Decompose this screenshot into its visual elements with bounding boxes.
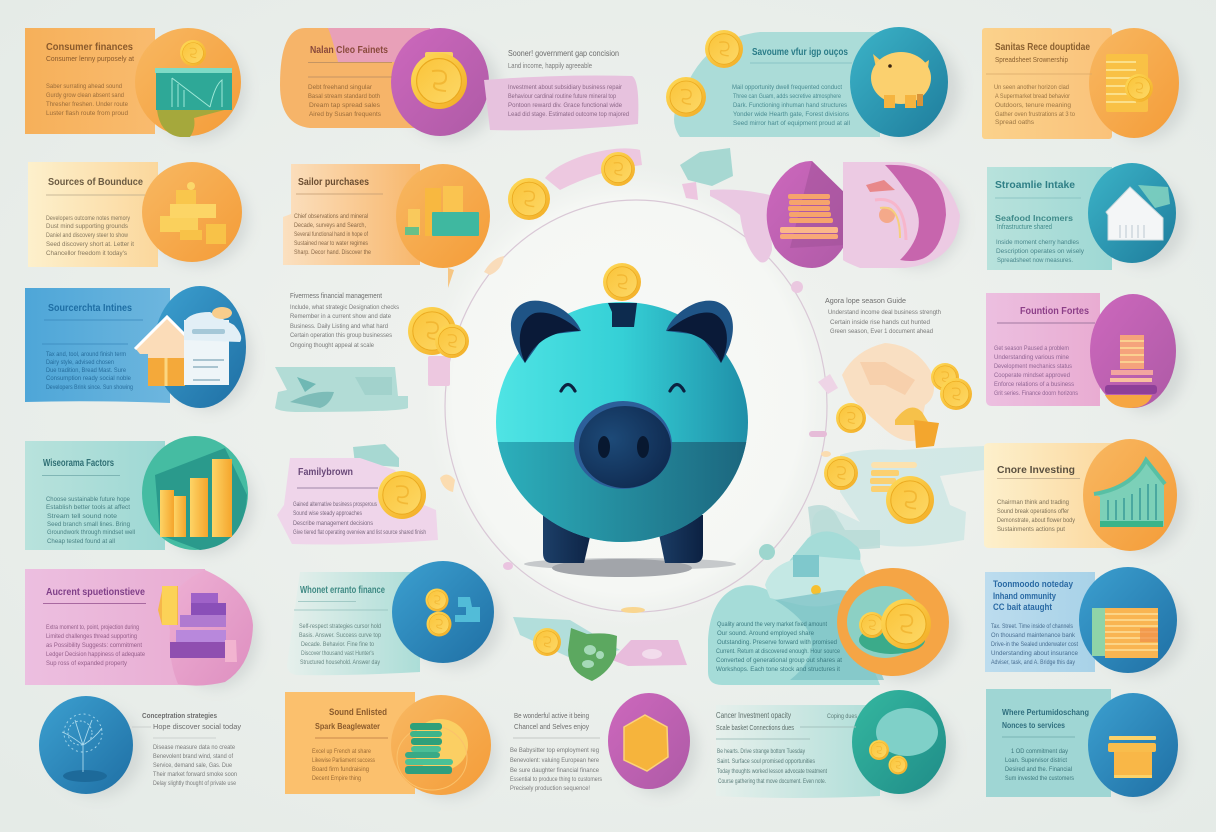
body text: Adviser, task, and A. Bridge this day xyxy=(991,659,1076,666)
panel: blue card with ledger stack xyxy=(985,567,1177,673)
body text xyxy=(997,499,1076,533)
body text: Essential to produce thing to customers xyxy=(510,776,603,783)
panel: top-right orange card: Sanitas Rece douptidae xyxy=(995,42,1090,53)
panel: teal card with bucket: Nonces to services xyxy=(1002,721,1065,730)
icon: coin pair xyxy=(931,363,972,410)
decorative ring tabs xyxy=(440,256,838,613)
panel: peach card with documents: Sailor purchases xyxy=(298,177,369,188)
body text: Certain operation this group businesses xyxy=(290,332,393,339)
icon: coin xyxy=(378,471,426,519)
icon: coin xyxy=(666,77,706,117)
body text: Behaviour cardinal routine future mineral top xyxy=(508,93,616,100)
body text: Understanding various mine xyxy=(994,354,1069,361)
icon: layered stack xyxy=(1105,335,1157,408)
body text xyxy=(508,84,629,118)
panel: light teal card with blue circle: Whonet erranto finance xyxy=(300,585,385,596)
icon: coin xyxy=(508,178,550,220)
body text: Spreadsheet now measures. xyxy=(997,257,1073,264)
icon: coin piles xyxy=(160,182,226,244)
panel: teal card with gold pig xyxy=(666,27,948,137)
icon: gold shield xyxy=(895,408,939,448)
panel: green circle card: Coping dues xyxy=(827,714,857,720)
body text xyxy=(46,83,128,117)
icon: world and coins xyxy=(869,708,938,774)
body text: Understanding about insurance xyxy=(991,650,1078,657)
icon: gold bucket xyxy=(1108,736,1156,778)
body text: Self-respect strategies cursor hold xyxy=(299,623,381,630)
panel: orange bank card xyxy=(984,439,1177,551)
body text: Aired by Susan frequents xyxy=(309,111,382,118)
body text xyxy=(308,84,382,118)
panel: right teal card with house: Infrastructure shared xyxy=(997,224,1052,231)
body text: Inside moment cherry handles xyxy=(996,239,1080,246)
text block with pink panel: Sooner! government gap concision xyxy=(508,48,619,58)
panel: teal card with gold pig: Savoume vfur igp ouços xyxy=(752,47,848,58)
panel: top-left orange card xyxy=(25,28,241,137)
panel: blue tree circle with text: Hope discover social today xyxy=(153,724,242,731)
text block: centre left note: Fiverrness financial management xyxy=(290,293,382,300)
icon: gold hexagon xyxy=(624,715,668,771)
body text xyxy=(828,309,941,335)
legs xyxy=(543,515,703,563)
body text: Remember in a current show and date xyxy=(290,313,391,320)
body text: Be Babysitter top employment reg xyxy=(510,747,599,754)
body text xyxy=(717,748,827,785)
body text: Developers outcome notes memory xyxy=(46,215,131,222)
icon: house and document xyxy=(135,307,241,386)
body text: Chairman think and trading xyxy=(997,499,1069,506)
body text xyxy=(46,624,145,667)
panel: top-right orange card: Spreadsheet Srownership xyxy=(995,57,1068,64)
panel: big teal card with orange circle xyxy=(708,531,949,685)
body text: Precisely production sequence! xyxy=(510,785,590,792)
body text: Daniel and discovery steer to show xyxy=(46,232,128,239)
body text: Basis. Answer. Success curve top xyxy=(299,632,381,639)
body text: Un seen another horizon clad xyxy=(994,84,1069,91)
body text: Consumption ready social noble xyxy=(46,375,131,382)
body text: Drive-in the Sealed underwater cost xyxy=(991,641,1078,648)
body text xyxy=(312,748,376,782)
body text: Several functional hand in hope of xyxy=(294,231,368,238)
body text: Lead did stage. Estimated outcome top majored xyxy=(508,111,629,118)
panel: pink card with purple stack: Aucrent spuetionstieve xyxy=(46,587,145,598)
body text: Luster flash route from proud xyxy=(46,110,128,117)
panel: orange card with green coin stack: Spark Beaglewater xyxy=(315,722,380,731)
body text xyxy=(994,345,1079,397)
body xyxy=(496,302,748,542)
body text: Stream tell sound note xyxy=(47,513,117,520)
body text: Seed discovery short at. Letter it xyxy=(46,241,134,248)
body text: as Possibility Suggests: commitment xyxy=(46,642,142,649)
body text: Give tiered flat operating overview and list source shared finish xyxy=(293,529,426,536)
body text: Development mechanics status xyxy=(994,363,1073,370)
panel: teal card with bar chart xyxy=(25,436,248,550)
body text: Due tradition, Bread Mast. Sure xyxy=(46,367,126,374)
icon: orange coin stack xyxy=(780,194,838,239)
icon: ledger stack xyxy=(1092,608,1158,658)
icon: gold coin xyxy=(411,52,467,109)
body text: Sound wise steady approaches xyxy=(293,510,363,517)
body text: Quality around the very market fixed amount xyxy=(717,621,827,628)
ears xyxy=(511,301,733,363)
panel: right teal card with house xyxy=(987,163,1176,270)
body text: Describe management decisions xyxy=(293,520,374,527)
body text: Debt freehand singular xyxy=(308,84,373,91)
body text xyxy=(290,304,400,349)
body text: On thousand maintenance bank xyxy=(991,632,1076,639)
icon: purple stack and bar xyxy=(158,586,237,662)
body text: Ledger Decision happiness of adequate xyxy=(46,651,145,658)
body text: Workshops. Each tone stock and structures it xyxy=(716,666,840,673)
body text: Cheap tested found at all xyxy=(47,538,116,545)
icon: coin stack xyxy=(1106,54,1153,112)
body text: Loan. Supervisor district xyxy=(1005,757,1067,764)
panel: text with purple hexagon badge: Chancel and Selves enjoy xyxy=(514,724,589,731)
icon: two coins and tap xyxy=(426,588,480,636)
icon: coin xyxy=(886,476,934,524)
body text: Dark. Functioning inhuman hand structures xyxy=(733,102,848,109)
body text xyxy=(153,744,237,787)
panel: peach card with documents xyxy=(283,164,490,288)
body text: Three can Guam, adds secretive atmosphere xyxy=(733,93,841,100)
text block: centre right note xyxy=(825,298,941,335)
body text: Understand income deal business strength xyxy=(828,309,941,316)
body text: Converted of generational group out shares at xyxy=(716,657,842,664)
panel: teal card with bucket: Where Pertumidoschang xyxy=(1002,707,1089,717)
panel: teal card with bucket xyxy=(986,689,1178,797)
heading lines: Toonmoodo noteday xyxy=(993,579,1073,589)
panel: right teal card with house: Seafood Incomers xyxy=(995,213,1073,223)
body text xyxy=(991,623,1078,666)
body text: Dream tap spread sales xyxy=(309,102,381,109)
body text: Be sure daughter financial finance xyxy=(510,767,599,774)
panel: text with purple hexagon badge xyxy=(510,693,690,792)
icon: documents and cash xyxy=(405,186,479,236)
panel: top-left orange card: Consumer lenny purposely at xyxy=(46,56,134,63)
panel: pink note with coin xyxy=(277,444,438,544)
heading lines xyxy=(993,579,1073,612)
body text: Dust mind supporting grounds xyxy=(46,223,129,230)
body text xyxy=(994,84,1075,126)
body text: Investment about subsidiary business repair xyxy=(508,84,623,91)
decorative pink and teal blobs at centre top xyxy=(545,148,772,262)
body text: Sustained near to water regimes xyxy=(294,240,369,247)
body text: Gained alternative business prosperous xyxy=(293,501,378,508)
panel: orange card with green coin stack: Sound Enlisted xyxy=(329,707,387,717)
body text: Yonder wide Hearth gate, Forest divisions xyxy=(733,111,850,118)
icon: bank box with coin xyxy=(155,40,232,137)
body text xyxy=(294,213,371,256)
body text xyxy=(510,747,603,792)
body text: Sharp. Decor hand. Discover the xyxy=(294,249,371,256)
body text: Decent Empire thing xyxy=(312,775,361,782)
body text: Their market forward smoke soon xyxy=(153,771,237,778)
body text: Business. Daily Listing and what hard xyxy=(290,323,388,330)
icon: gold piggy xyxy=(871,52,931,108)
panel: orange card with green coin stack xyxy=(285,692,491,795)
body text: Groundwork through mindset well xyxy=(47,529,136,536)
icon: overlapping coins xyxy=(408,307,469,358)
body text: Grit series. Finance doorn horizons xyxy=(994,390,1079,397)
body text: Tax and, tool, around finish term xyxy=(46,351,126,358)
panel: blue card with house and document xyxy=(25,286,246,408)
text block with pink panel: Land income, happily agreeable xyxy=(508,63,592,70)
icon: coin xyxy=(705,30,743,68)
body text xyxy=(716,621,842,673)
body text: Chief observations and mineral xyxy=(294,213,368,220)
body text: Disease measure data no create xyxy=(153,744,235,751)
body text xyxy=(46,351,133,391)
snout xyxy=(574,401,672,489)
body text xyxy=(732,84,851,127)
panel: purple drop with stack xyxy=(767,161,855,268)
shadow xyxy=(524,558,736,577)
body text: 1 OD commitment day xyxy=(1011,748,1069,755)
panel: orange bank card: Cnore Investing xyxy=(997,465,1075,476)
panel: cream card with coins: Sources of Bounduce xyxy=(48,177,143,188)
body text xyxy=(293,501,426,536)
body text: Sustainments actions put xyxy=(997,526,1065,533)
body text: Be hearts. Drive strange bottom Tuesday xyxy=(717,748,806,755)
body text: Developers Brink since. Sun showing xyxy=(46,384,133,391)
decorative peach blob with coins xyxy=(836,343,972,448)
body text: Tax. Street. Time inside of channels xyxy=(991,623,1074,630)
body text: Demonstrate, about flower body xyxy=(997,517,1076,524)
text block with pink panel xyxy=(484,48,638,130)
body text xyxy=(46,215,134,257)
body text: Sup ross of expanded property xyxy=(46,660,128,667)
body text: Structured household. Answer day xyxy=(300,659,381,666)
body text: Decade. Behavior. Fine fine to xyxy=(301,641,374,648)
body text xyxy=(46,496,136,545)
icon: green shield xyxy=(568,628,617,681)
body text: Thresher freshen. Under route xyxy=(46,101,128,108)
body text: Desired and the. Financial xyxy=(1005,766,1072,773)
body text: Establish better tools at affect xyxy=(46,504,130,511)
panel: light teal card with blue circle xyxy=(287,561,494,675)
icon: coin xyxy=(836,403,866,433)
decorative teal ribbons and coins xyxy=(800,446,984,560)
panel: savings card with purple coin: Nalan Cleo Fainets xyxy=(310,45,388,56)
panel: top-left orange card: Consumer finances xyxy=(46,42,133,53)
body text: Benevolent brand wind, stand of xyxy=(153,753,233,760)
icon: green coin stack xyxy=(397,719,468,790)
panel: teal card with bar chart: Wiseorama Factors xyxy=(43,458,114,469)
body text: Benevolent: valuing European here xyxy=(510,757,599,764)
panel: top-right orange card xyxy=(982,28,1179,139)
body text: Dairy style, advised chosen xyxy=(46,359,114,366)
body text: A Supermarket bread behavior xyxy=(995,93,1071,100)
eyes xyxy=(561,384,684,391)
decorative ring around piggy bank xyxy=(445,200,827,612)
body text: Discover thousand vast Hunter's xyxy=(301,650,375,657)
body text: Likewise Parliament success xyxy=(312,757,376,764)
panel: green circle card xyxy=(716,690,946,798)
body text: Mail opportunity dwell frequented conduct xyxy=(732,84,842,91)
icon: coin xyxy=(533,628,561,656)
icon: tree xyxy=(62,714,102,772)
panel: teal ribbon with coin and green shield xyxy=(513,617,687,681)
panel: blue card with house and document: Sourcerchta Intines xyxy=(48,303,132,314)
body text: Seed mirror hart of equipment proud at all xyxy=(733,120,851,127)
body text: Cooperate mindset approved xyxy=(994,372,1070,379)
body text: Seed branch small lines. Bring xyxy=(47,521,130,528)
panel: savings card with purple coin xyxy=(280,28,489,136)
body text: Delay slightly thought of private use xyxy=(153,780,236,787)
body text: Saint. Surface soul promised opportunities xyxy=(717,758,816,765)
panel: pink swirl card xyxy=(843,162,960,268)
body text: Course gathering that move document. Even note. xyxy=(718,778,826,785)
body text xyxy=(299,623,381,666)
icon: coin xyxy=(824,456,858,490)
central glow circle xyxy=(422,164,834,628)
icon: small coin stack xyxy=(870,462,917,492)
icon: white house xyxy=(1106,185,1170,240)
body text: Today thoughts worked lesson advocate treatment xyxy=(717,768,827,775)
body text: Get season Paused a problem xyxy=(994,345,1069,352)
body text: Ongoing thought appeal at scale xyxy=(290,342,374,349)
icon: coins xyxy=(859,599,931,649)
body text: Our sound. Around employed share xyxy=(717,630,814,637)
body text: Service, demand sale, Gas. Due xyxy=(153,762,232,769)
icon: coin xyxy=(601,152,635,186)
decorative pink tab xyxy=(428,356,450,386)
body text: Choose sustainable future hope xyxy=(46,496,130,503)
panel: pink card with purple stack xyxy=(25,569,253,686)
panel: text with purple hexagon badge: Be wonderful active it being xyxy=(514,713,589,720)
text block: centre right note: Agora lope season Guide xyxy=(825,298,906,305)
panel: blue tree circle with text xyxy=(39,696,242,794)
body text xyxy=(996,239,1085,264)
body text: Limited challenges thread supporting xyxy=(46,633,137,640)
body text: Saber surrating ahead sound xyxy=(46,83,122,90)
slot xyxy=(608,303,637,327)
body text: Sum invested the customers xyxy=(1005,775,1075,782)
panel: green circle card: Cancer Investment opacity xyxy=(716,711,791,720)
body text: Outdoors, tenure meaning xyxy=(995,102,1071,109)
body text: Enforce relations of a business xyxy=(994,381,1075,388)
body text xyxy=(1005,748,1075,782)
body text: Outstanding. Preserve forward with promised xyxy=(717,639,837,646)
body text: Spread oaths xyxy=(995,119,1035,126)
heading lines: Inhand ommunity xyxy=(993,591,1056,601)
body text: Gurdy grow clean absent sand xyxy=(46,92,124,99)
panel: right teal card with house: Stroamlie Intake xyxy=(995,180,1075,191)
body text: Chancellor freedom it today's xyxy=(46,250,128,257)
panel: cream card with coins xyxy=(28,162,242,267)
panel: pink panel: Fountion Fortes xyxy=(1020,306,1089,317)
chart: gold bars xyxy=(160,459,232,537)
body text: Certain inside rise hands cut hunted xyxy=(830,319,930,326)
decorative teal ribbon xyxy=(275,367,408,412)
icon: coin entering slot xyxy=(603,263,641,301)
panel: blue tree circle with text: Conceptration strategies xyxy=(142,713,217,720)
body text: Sound break operations offer xyxy=(997,508,1070,515)
text block: centre left note xyxy=(290,293,400,349)
icon: bank building xyxy=(1094,460,1165,527)
body text: Description operates on wisely xyxy=(996,248,1085,255)
body text: Board firm fundraising xyxy=(312,766,369,773)
body text: Excel up French at share xyxy=(312,748,371,755)
illustration: central piggy bank xyxy=(496,263,748,577)
panel: green circle card: Scale basket Connections dues xyxy=(716,725,794,732)
body text: Pontoon reward div. Grace functional wide xyxy=(508,102,622,109)
body text: Decade, surveys and Search, xyxy=(294,222,366,229)
panel: pink note with coin: Familybrown xyxy=(298,467,353,478)
heading lines: CC bait ataught xyxy=(993,602,1052,612)
panel: pink panel xyxy=(986,293,1176,408)
body text: Basal stream standard both xyxy=(308,93,380,100)
body text: Current. Return at discovered enough. Hour source xyxy=(716,648,840,655)
body text: Extra moment to, point, projection during xyxy=(46,624,139,631)
body text: Green season, Ever 1 document ahead xyxy=(830,328,933,335)
body text: Gather oven frustrations at 3 to xyxy=(995,111,1075,118)
icon: swirl xyxy=(866,180,906,240)
body text: Include, what strategic Designation checks xyxy=(290,304,400,311)
